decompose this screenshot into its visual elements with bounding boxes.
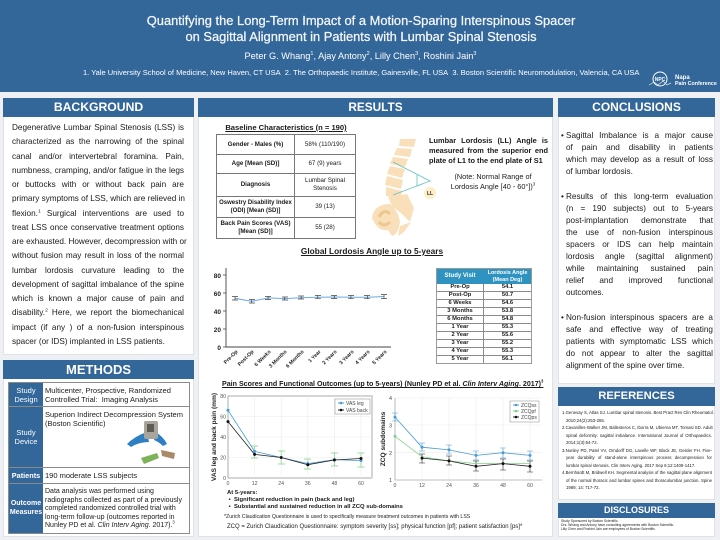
line chart: ZCQ subdomains: 2 bbox=[389, 451, 392, 457]
logo: Napa Pain Conference: Pain Conference bbox=[675, 81, 717, 87]
line chart: ZCQ subdomains bbox=[380, 396, 542, 489]
table rows: 4 Year bbox=[452, 348, 468, 354]
bullet: safe and effective: alignment of the spine over time. bbox=[566, 361, 684, 370]
line chart: VAS pain scores: VAS leg bbox=[346, 401, 364, 407]
row: patients: Patients bbox=[12, 471, 40, 480]
text block: references: 2.Cavanilles-Walker JM, Ballesteros C, Iborra M, Ubierna MT, Tomasi SD. Adult bbox=[562, 425, 713, 430]
heading: methods: METHODS bbox=[66, 362, 131, 377]
line chart: lordosis angle bbox=[214, 268, 391, 370]
panel: disclosures bbox=[558, 503, 715, 537]
row: patients bbox=[9, 468, 189, 484]
table rows: 3 Months bbox=[447, 308, 473, 314]
panel: results bbox=[198, 98, 553, 537]
line chart: lordosis angle: Pre-Op bbox=[223, 349, 239, 366]
line chart: VAS pain scores: 40 bbox=[220, 435, 226, 441]
logo: Napa Pain Conference bbox=[649, 72, 717, 87]
text block: LL definition: Lumbar Lordosis (LL) Angle is bbox=[429, 136, 548, 145]
logo: Napa Pain Conference: Napa bbox=[675, 75, 690, 81]
table: baseline characteristics: Diagnosis bbox=[241, 181, 270, 188]
text block: background: without fusion may result in loss of the normal bbox=[12, 251, 184, 260]
text block: disclosures: Drs. Whang and Antony have consulting agreements with Boston Scientific. bbox=[561, 523, 674, 527]
text block: references: 3.Nunley PD, Patel VV, Orndorff DG, Lavelle WF, Block JE, Geisler FH. Five- bbox=[562, 448, 712, 452]
row: study device: (Boston Scientific) bbox=[45, 419, 105, 428]
table: baseline characteristics: 58% (110/190) bbox=[305, 140, 345, 148]
heading: results bbox=[198, 98, 553, 117]
table rows: 55.3 bbox=[502, 324, 513, 330]
bullet: safe and effective: safe and effective way of treating bbox=[566, 325, 713, 334]
text block: references: 4.Bernhardt M, Bridwell KH. Segmental analysis of the sagittal plane alignment bbox=[562, 470, 712, 475]
title: Quantifying the Long-Term Impact of a Motion-Sparing Interspinous Spacer bbox=[147, 13, 575, 28]
row: patients: 190 moderate LSS subjects bbox=[45, 471, 137, 480]
text block: background: numbness, cramping, and/or fatigue in the legs bbox=[12, 166, 184, 175]
heading: references bbox=[558, 387, 715, 406]
text block: background bbox=[12, 123, 187, 346]
heading: conclusions bbox=[558, 98, 715, 117]
line chart: VAS pain scores: 0 bbox=[223, 476, 226, 482]
row: study design: Study bbox=[16, 386, 36, 395]
line chart: VAS pain scores: 24 bbox=[278, 481, 284, 487]
text block: background: treat LSS once conservative treatment options bbox=[12, 223, 184, 232]
row: outcome measures bbox=[9, 484, 182, 533]
line chart: lordosis angle: 6 Months bbox=[285, 349, 305, 370]
bullet: long-term evaluation: the use of non-fusion interspinous bbox=[566, 228, 713, 237]
row: study device: Study bbox=[16, 428, 36, 437]
table: baseline characteristics bbox=[216, 134, 356, 239]
line chart: lordosis angle: 20 bbox=[214, 327, 221, 334]
line chart: VAS pain scores: 36 bbox=[305, 481, 311, 487]
table rows: 56.1 bbox=[502, 356, 513, 362]
affiliations: 1. Yale University School of Medicine, New Haven, CT USA 2. The Orthopaedic Institute, Gainesville, FL USA 3. Boston Scientific Neuromodulation, Valencia, CA USA bbox=[83, 68, 639, 77]
methods table bbox=[8, 382, 190, 534]
table rows: 55.2 bbox=[502, 340, 513, 346]
bullet: safe and effective: Non-fusion interspinous spacers are a bbox=[566, 312, 713, 322]
bullet: long-term evaluation: spacers or IDS can help maintain bbox=[566, 240, 713, 249]
line chart: lordosis angle: Post-Op bbox=[237, 349, 255, 368]
bullet: long-term evaluation bbox=[561, 192, 713, 297]
text block: background: development of sagittal imbalance of the spine bbox=[12, 280, 184, 289]
row: study device: Device bbox=[15, 437, 37, 446]
text block: 5-year findings: At 5-years: bbox=[227, 490, 257, 496]
text block: background: canal and/or intervertebral foramina. Pain, bbox=[12, 152, 184, 160]
line chart: VAS pain scores bbox=[211, 393, 373, 487]
text block: background: impact (if any ) of a non-fusion interspinous bbox=[12, 322, 184, 332]
table rows: Post-Op bbox=[449, 292, 471, 298]
row: outcome measures: completed randomized controlled trial with bbox=[45, 505, 176, 512]
line chart: ZCQ subdomains: ZCQ subdomains bbox=[380, 411, 387, 466]
row: study design: Design bbox=[14, 395, 38, 404]
line chart: ZCQ subdomains: 0 bbox=[394, 483, 397, 489]
bullet: sagittal imbalance: Sagittal Imbalance is a major cause bbox=[566, 131, 713, 140]
row: outcome measures: radiographs collected as part of a previously bbox=[45, 497, 182, 504]
footnote: ZCQ definition: ZCQ = Zurich Claudication Questionnaire: symptom severity [ss]; physical function [pf]; patient satisfaction [ps]* bbox=[227, 524, 522, 530]
row: outcome measures: Nunley PD et al. Clin Interv Aging. 2017).3 bbox=[45, 520, 175, 529]
text block: disclosures bbox=[561, 519, 674, 531]
logo: Napa Pain Conference: NPC bbox=[655, 77, 666, 83]
text block: background: primary symptoms of LSS, which are relieved in bbox=[12, 194, 185, 203]
text block: references: spinal deformity: sagittal imbalance. International Journal of Orthopaedics. bbox=[566, 432, 712, 438]
table: baseline characteristics: 55 (28) bbox=[315, 224, 335, 231]
heading: background: BACKGROUND bbox=[54, 100, 143, 114]
text block: references: year durability of stand-alone interspinous process decompression for bbox=[566, 455, 712, 460]
text block: references: 1.Genevay S, Atlas SJ. Lumbar spinal stenosis. Best Pract Res Clin Rheumatol. bbox=[562, 410, 714, 415]
row: outcome measures: Data analysis was performed using bbox=[45, 488, 154, 495]
bullet: safe and effective bbox=[561, 312, 713, 370]
table rows: 54.1 bbox=[502, 284, 513, 290]
line chart: ZCQ subdomains: 4 bbox=[389, 396, 392, 402]
bullet: long-term evaluation: • bbox=[561, 192, 564, 200]
line chart: ZCQ subdomains: 1 bbox=[389, 478, 392, 484]
heading: results: RESULTS bbox=[348, 100, 403, 114]
line chart: lordosis angle: 80 bbox=[214, 273, 221, 280]
line chart: lordosis angle: 0 bbox=[217, 345, 221, 352]
table: baseline characteristics: Age [Mean (SD)] bbox=[232, 160, 279, 167]
illustration: lumbar spine with LL angle bbox=[372, 139, 436, 236]
text block: 5-year findings: • Significant reduction in pain (back and leg) bbox=[229, 497, 354, 503]
table: baseline characteristics: Stenosis bbox=[313, 185, 337, 192]
row: study design bbox=[9, 383, 189, 407]
line chart: ZCQ subdomains: ZCQpf bbox=[521, 409, 536, 415]
heading: references: REFERENCES bbox=[598, 390, 675, 402]
text block: background: spacer (or IDS) implanted in LSS patients. bbox=[12, 337, 165, 346]
heading: disclosures: DISCLOSURES bbox=[604, 505, 669, 515]
table header: (Mean Deg) bbox=[493, 277, 522, 283]
row: outcome measures: Measures bbox=[10, 509, 42, 516]
line chart: ZCQ subdomains: 12 bbox=[419, 483, 425, 489]
line chart: lordosis angle: 6 Weeks bbox=[254, 349, 272, 368]
line chart: lordosis angle: 3 Years bbox=[338, 349, 355, 366]
footnote: ZCQ use: *Zurich Claudication Questionnaire is used to specifically measure treatment outcomes in patients with LSS bbox=[224, 514, 470, 520]
bullet: safe and effective: • bbox=[561, 312, 564, 322]
text block: background: characterized as the narrowing of the spinal bbox=[12, 137, 184, 146]
row: study device: Superion Indirect Decompression System bbox=[45, 410, 183, 419]
line chart: VAS pain scores: 48 bbox=[332, 481, 337, 487]
table header bbox=[437, 269, 531, 284]
header banner bbox=[0, 0, 720, 92]
line chart: lordosis angle: 60 bbox=[214, 291, 221, 298]
line chart: ZCQ subdomains: 36 bbox=[473, 483, 479, 489]
table: lordosis angle by visit bbox=[436, 268, 532, 364]
line chart: lordosis angle: 5 Years bbox=[371, 349, 388, 366]
bullet: long-term evaluation: post-implantation demonstrate that bbox=[566, 216, 713, 225]
line chart: VAS pain scores: VAS leg and back pain (mm) bbox=[211, 393, 218, 481]
text block: background: Degenerative Lumbar Spinal Stenosis (LSS) is bbox=[12, 123, 184, 132]
line chart: ZCQ subdomains: ZCQps bbox=[521, 415, 537, 421]
table rows: 53.8 bbox=[502, 308, 513, 314]
table rows: 1 Year bbox=[452, 324, 468, 330]
line chart: ZCQ subdomains: 60 bbox=[527, 483, 533, 489]
panel: background bbox=[3, 98, 194, 355]
table: baseline characteristics: Gender - Males (%) bbox=[228, 140, 283, 148]
row: study device bbox=[9, 407, 189, 468]
table rows: 54.6 bbox=[502, 300, 513, 306]
table header: Study Visit bbox=[445, 273, 475, 279]
text block: references bbox=[562, 410, 714, 490]
bullet: sagittal imbalance bbox=[561, 131, 713, 176]
heading: background bbox=[3, 98, 194, 117]
line chart: VAS pain scores: 60 bbox=[220, 414, 226, 420]
panel: methods bbox=[3, 360, 194, 537]
bullet: sagittal imbalance: of pain and disability in patients bbox=[566, 143, 713, 152]
bullet: long-term evaluation: Results of this long-term evaluation bbox=[566, 192, 713, 200]
text block: background: flexion.1 Surgical interventions are used to bbox=[12, 208, 184, 218]
heading: baseline characteristics: Baseline Characteristics (n = 190) bbox=[225, 123, 347, 132]
text block: references: lumbar spinal stenosis. Clin Interv Aging. 2017 Sep 6;12:1409-1417. bbox=[566, 462, 695, 468]
table rows: 6 Months bbox=[447, 316, 473, 322]
title bbox=[147, 13, 576, 44]
table: baseline characteristics: [Mean (SD)] bbox=[238, 228, 273, 235]
text block: LL definition: plate of L1 to the end plate of S1 bbox=[429, 156, 543, 165]
table: baseline characteristics: (ODI) [Mean (SD)] bbox=[231, 208, 280, 214]
bullet: sagittal imbalance: of lumbar lordosis. bbox=[566, 167, 633, 176]
panel: conclusions bbox=[558, 98, 715, 384]
text block: background: which is known a major cause of pain and bbox=[12, 294, 184, 303]
table rows: 55.6 bbox=[502, 332, 513, 338]
text block: LL definition: measured from the superior end bbox=[429, 146, 548, 155]
heading: methods bbox=[3, 360, 194, 379]
line chart: VAS pain scores: 20 bbox=[220, 456, 226, 462]
text block: background: or buttocks with or without back pain are bbox=[12, 180, 184, 189]
line chart: ZCQ subdomains: ZCQss bbox=[521, 403, 537, 409]
text block: background: disability.2 Here, we report the biomechanical bbox=[12, 308, 184, 317]
authors: Peter G. Whang1, Ajay Antony2, Lilly Chen3, Roshini Jain3 bbox=[245, 51, 476, 61]
text block: references: 2010;24(2):253-265. bbox=[566, 418, 605, 422]
text block: disclosures: Study Sponsored by Boston Scientific. bbox=[561, 519, 618, 523]
table rows: 55.3 bbox=[502, 348, 513, 354]
row: outcome measures: Outcome bbox=[11, 500, 41, 507]
icon: spacer device bbox=[127, 421, 175, 464]
line chart: lordosis angle: 3 Months bbox=[268, 349, 288, 370]
line chart: lordosis angle: 4 Years bbox=[354, 349, 371, 366]
heading: global lordosis: Global Lordosis Angle up to 5-years bbox=[301, 246, 443, 256]
table: baseline characteristics: Back Pain Scores (VAS) bbox=[220, 220, 291, 227]
heading: pain scores and functional outcomes: Pain Scores and Functional Outcomes (up to 5-years) (Nunley PD et al. Clin Interv Aging. 2017)3 bbox=[222, 379, 543, 388]
text block: conclusions bbox=[561, 131, 713, 370]
table rows: 50.7 bbox=[502, 292, 513, 298]
text block: references: of the normal thoracic and lumbar spines and thoracolumbar junction. Spine bbox=[566, 478, 712, 482]
line chart: ZCQ subdomains: 48 bbox=[500, 483, 506, 489]
bullet: safe and effective: do not appear to alter the sagittal bbox=[566, 349, 713, 358]
table rows: Pre-Op bbox=[450, 284, 470, 290]
note: normal range: Lordosis Angle [40 - 60°])3 bbox=[451, 181, 535, 191]
table rows: 3 Year bbox=[452, 340, 468, 346]
bullet: sagittal imbalance: which may develop as a result of loss bbox=[566, 155, 713, 164]
text block: background: lumbar lordosis curvature leading to the bbox=[12, 266, 184, 274]
text block: background: are exhausted. However, decompression with or bbox=[12, 237, 187, 246]
bullet: sagittal imbalance: • bbox=[561, 131, 564, 140]
note: normal range: (Note: Normal Range of bbox=[454, 172, 532, 181]
table: baseline characteristics: Lumbar Spinal bbox=[305, 177, 345, 184]
text block: LL definition bbox=[429, 136, 548, 165]
table rows: 2 Year bbox=[452, 332, 468, 338]
line chart: ZCQ subdomains: 3 bbox=[389, 424, 392, 430]
table: baseline characteristics: Oswestry Disability Index bbox=[219, 200, 292, 206]
title: on Sagittal Alignment in Patients with Lumbar Spinal Stenosis bbox=[185, 28, 537, 44]
line chart: lordosis angle: 2 Years bbox=[321, 349, 338, 366]
line chart: VAS pain scores: VAS back bbox=[346, 408, 368, 414]
bullet: safe and effective: patients with symptomatic LSS which bbox=[566, 337, 713, 346]
text block: 5-year findings: • Substantial and sustained reduction in all ZCQ sub-domains bbox=[229, 504, 403, 510]
bullet: long-term evaluation: outcomes. bbox=[566, 288, 604, 297]
text block: disclosures: Lilly Chen and Roshini Jain are employees of Boston Scientific. bbox=[561, 527, 656, 531]
bullet: long-term evaluation: (n = 190 subjects) out to 5-years bbox=[566, 204, 713, 213]
heading: conclusions: CONCLUSIONS bbox=[592, 100, 681, 114]
table: baseline characteristics: 39 (13) bbox=[315, 203, 335, 210]
illustration: lumbar spine with LL angle: LL bbox=[427, 191, 433, 197]
row: study design: Multicenter, Prospective, Randomized bbox=[45, 386, 171, 395]
table rows: 6 Weeks bbox=[448, 300, 472, 306]
text block: references: 1989; 14: 717-72. bbox=[566, 485, 600, 490]
table header: Lordosis Angle bbox=[488, 270, 527, 276]
bullet: long-term evaluation: relief and improved functional bbox=[566, 276, 713, 285]
heading: disclosures bbox=[558, 503, 715, 518]
line chart: lordosis angle: 40 bbox=[214, 309, 221, 316]
line chart: VAS pain scores: 0 bbox=[227, 481, 230, 487]
table rows bbox=[437, 284, 531, 363]
text block: 5-year findings bbox=[227, 490, 403, 510]
bullet: long-term evaluation: lordosis angle (sagittal alignment) bbox=[566, 252, 713, 261]
line chart: ZCQ subdomains: 24 bbox=[446, 483, 452, 489]
row: study design: Controlled Trial: Imaging Analysis bbox=[45, 395, 158, 404]
bullet: long-term evaluation: while maintaining sustained pain bbox=[566, 264, 713, 273]
row: outcome measures: long-term follow-up (outcomes reported in bbox=[45, 514, 175, 521]
table: baseline characteristics: 67 (9) years bbox=[308, 160, 342, 167]
table rows: 54.8 bbox=[502, 316, 513, 322]
line chart: VAS pain scores: 60 bbox=[358, 481, 364, 487]
line chart: lordosis angle: 1 Year bbox=[307, 349, 322, 364]
line chart: VAS pain scores: 12 bbox=[252, 481, 258, 487]
panel: references bbox=[558, 387, 715, 500]
note: normal range bbox=[451, 172, 535, 191]
line chart: VAS pain scores: 80 bbox=[220, 394, 226, 400]
table rows: 5 Year bbox=[452, 356, 468, 362]
text block: references: 2014;1(3):64-72. bbox=[566, 440, 598, 445]
